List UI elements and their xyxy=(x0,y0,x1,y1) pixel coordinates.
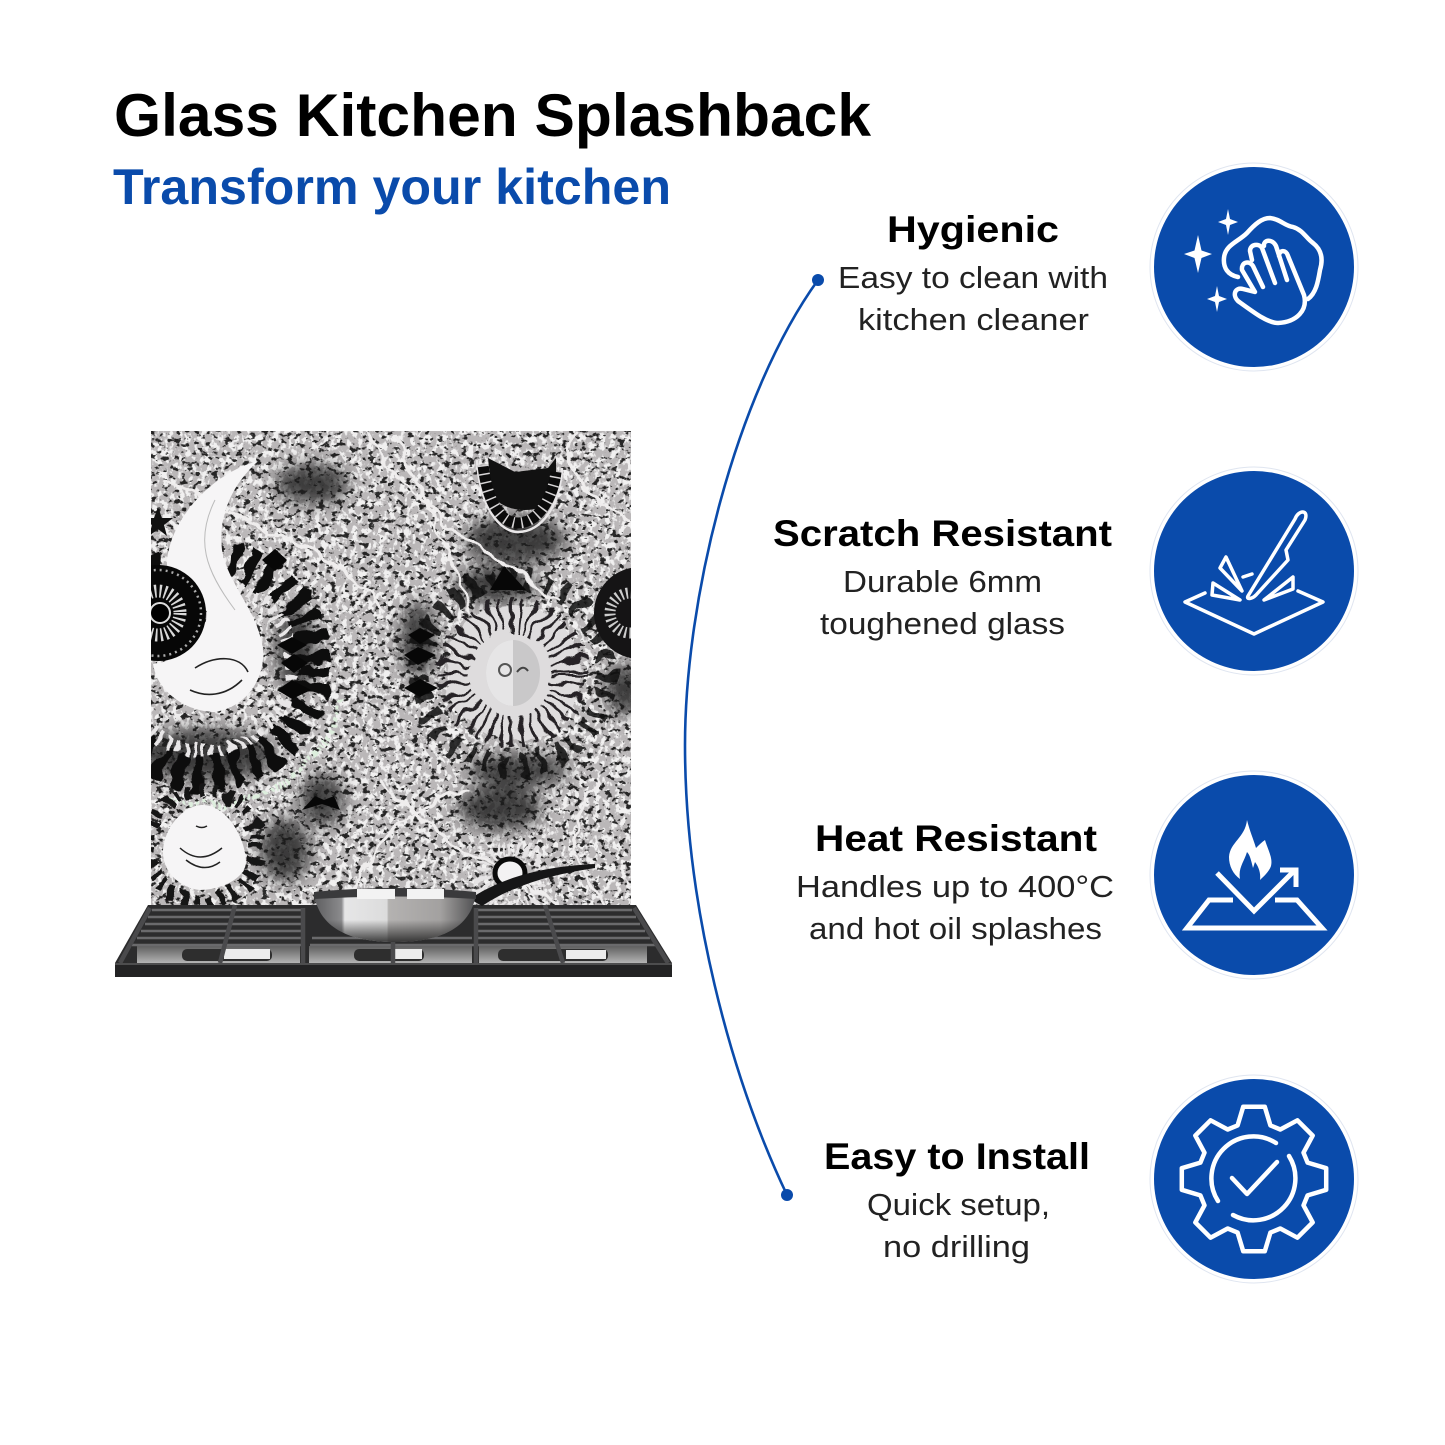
feature: Scratch Resistant: Scratch Resistant xyxy=(773,513,1112,554)
connector curve with end dots xyxy=(685,274,824,1201)
title: Glass Kitchen Splashback xyxy=(114,82,872,149)
feature: Easy to Install: no drilling xyxy=(883,1229,1030,1264)
product image: splashback behind gas hob xyxy=(97,431,686,977)
icon: flame on heat-resistant surface xyxy=(1150,771,1358,979)
icon: hand wiping with sparkles xyxy=(1150,163,1358,371)
left black eye xyxy=(151,565,206,661)
white paisley xyxy=(153,461,263,712)
icon: gear with check mark xyxy=(1150,1075,1358,1283)
arch motif xyxy=(488,458,556,510)
feature: Heat Resistant: Heat Resistant xyxy=(815,818,1097,859)
burners xyxy=(182,949,608,961)
patterned glass panel xyxy=(151,431,631,905)
feature: Easy to Install xyxy=(824,1136,1090,1264)
feature: Scratch Resistant: toughened glass xyxy=(820,606,1065,641)
feature: Hygienic xyxy=(838,209,1108,337)
feature: Heat Resistant: and hot oil splashes xyxy=(809,911,1102,946)
diamonds xyxy=(262,549,526,810)
feature: Hygienic: Hygienic xyxy=(887,209,1059,250)
silver sun face xyxy=(513,640,540,706)
icon: knife scratching glass xyxy=(1150,467,1358,675)
feature: Hygienic: kitchen cleaner xyxy=(858,302,1089,337)
pan supports xyxy=(132,910,655,945)
feature: Hygienic: Easy to clean with xyxy=(838,260,1108,295)
feature: Easy to Install: Easy to Install xyxy=(824,1136,1090,1177)
white egg xyxy=(163,805,246,890)
star xyxy=(151,507,173,536)
feature: Easy to Install: Quick setup, xyxy=(867,1187,1050,1222)
small eye xyxy=(495,859,525,887)
feature: Scratch Resistant: Durable 6mm xyxy=(843,564,1042,599)
hob xyxy=(115,905,672,977)
frying pan xyxy=(314,864,595,942)
feature: Scratch Resistant xyxy=(773,513,1112,641)
right black eye xyxy=(594,568,631,658)
feature: Heat Resistant: Handles up to 400°C xyxy=(796,869,1114,904)
feature: Heat Resistant xyxy=(796,818,1114,946)
subtitle: Transform your kitchen xyxy=(113,159,671,215)
